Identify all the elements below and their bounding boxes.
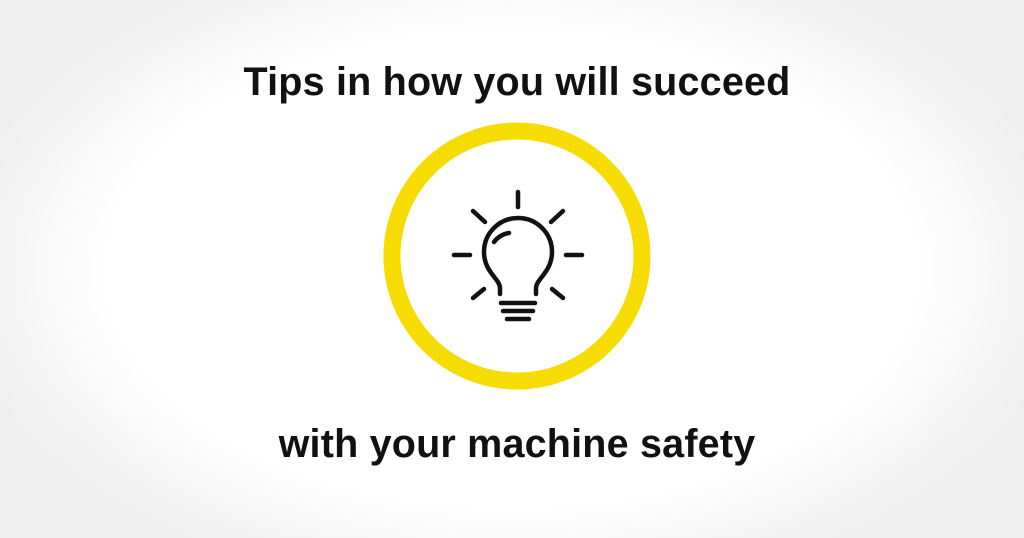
yellow ring <box>392 131 642 381</box>
title: Tips in how you will succeed <box>243 60 790 104</box>
lightbulb <box>454 192 582 319</box>
subtitle: with your machine safety <box>279 422 755 466</box>
